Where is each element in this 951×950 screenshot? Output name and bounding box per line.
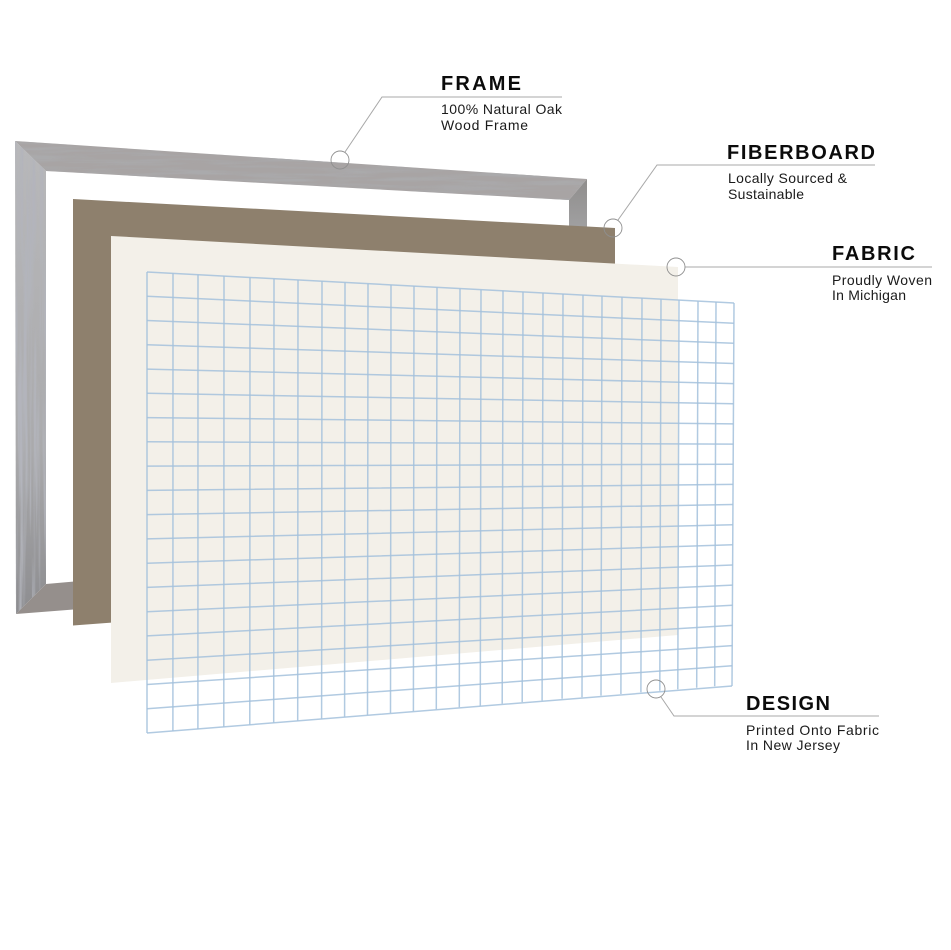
fiberboard panel (73, 199, 615, 626)
grid horizontal lines (147, 272, 734, 733)
fiberboard description (728, 170, 848, 202)
design: printed grid layer (147, 272, 734, 733)
callout: fabric (667, 243, 932, 303)
frame description (441, 101, 563, 133)
fabric leader line and marker (667, 258, 932, 276)
frame description: Wood Frame (441, 117, 528, 133)
grid vertical lines (147, 272, 734, 733)
design heading: DESIGN (746, 693, 830, 715)
design description: In New Jersey (746, 737, 840, 753)
fiberboard description: Sustainable (728, 186, 804, 202)
fabric description: Proudly Woven (832, 272, 932, 288)
fiberboard heading: FIBERBOARD (727, 142, 875, 164)
fabric description: In Michigan (832, 287, 906, 303)
callout: fiberboard (604, 142, 875, 237)
design description: Printed Onto Fabric (746, 722, 879, 738)
callout: frame (331, 73, 563, 169)
frame leader line and marker (331, 97, 562, 169)
fiberboard leader line and marker (604, 165, 875, 237)
fabric layer (111, 236, 678, 683)
callout: design (647, 680, 879, 753)
fiberboard description: Locally Sourced & (728, 170, 848, 186)
fabric heading: FABRIC (832, 243, 915, 265)
frame description: 100% Natural Oak (441, 101, 563, 117)
fabric description (832, 272, 932, 303)
design leader line and marker (647, 680, 879, 716)
design description (746, 722, 879, 753)
frame heading: FRAME (441, 73, 521, 95)
frame: oak wood frame layer (15, 141, 587, 614)
